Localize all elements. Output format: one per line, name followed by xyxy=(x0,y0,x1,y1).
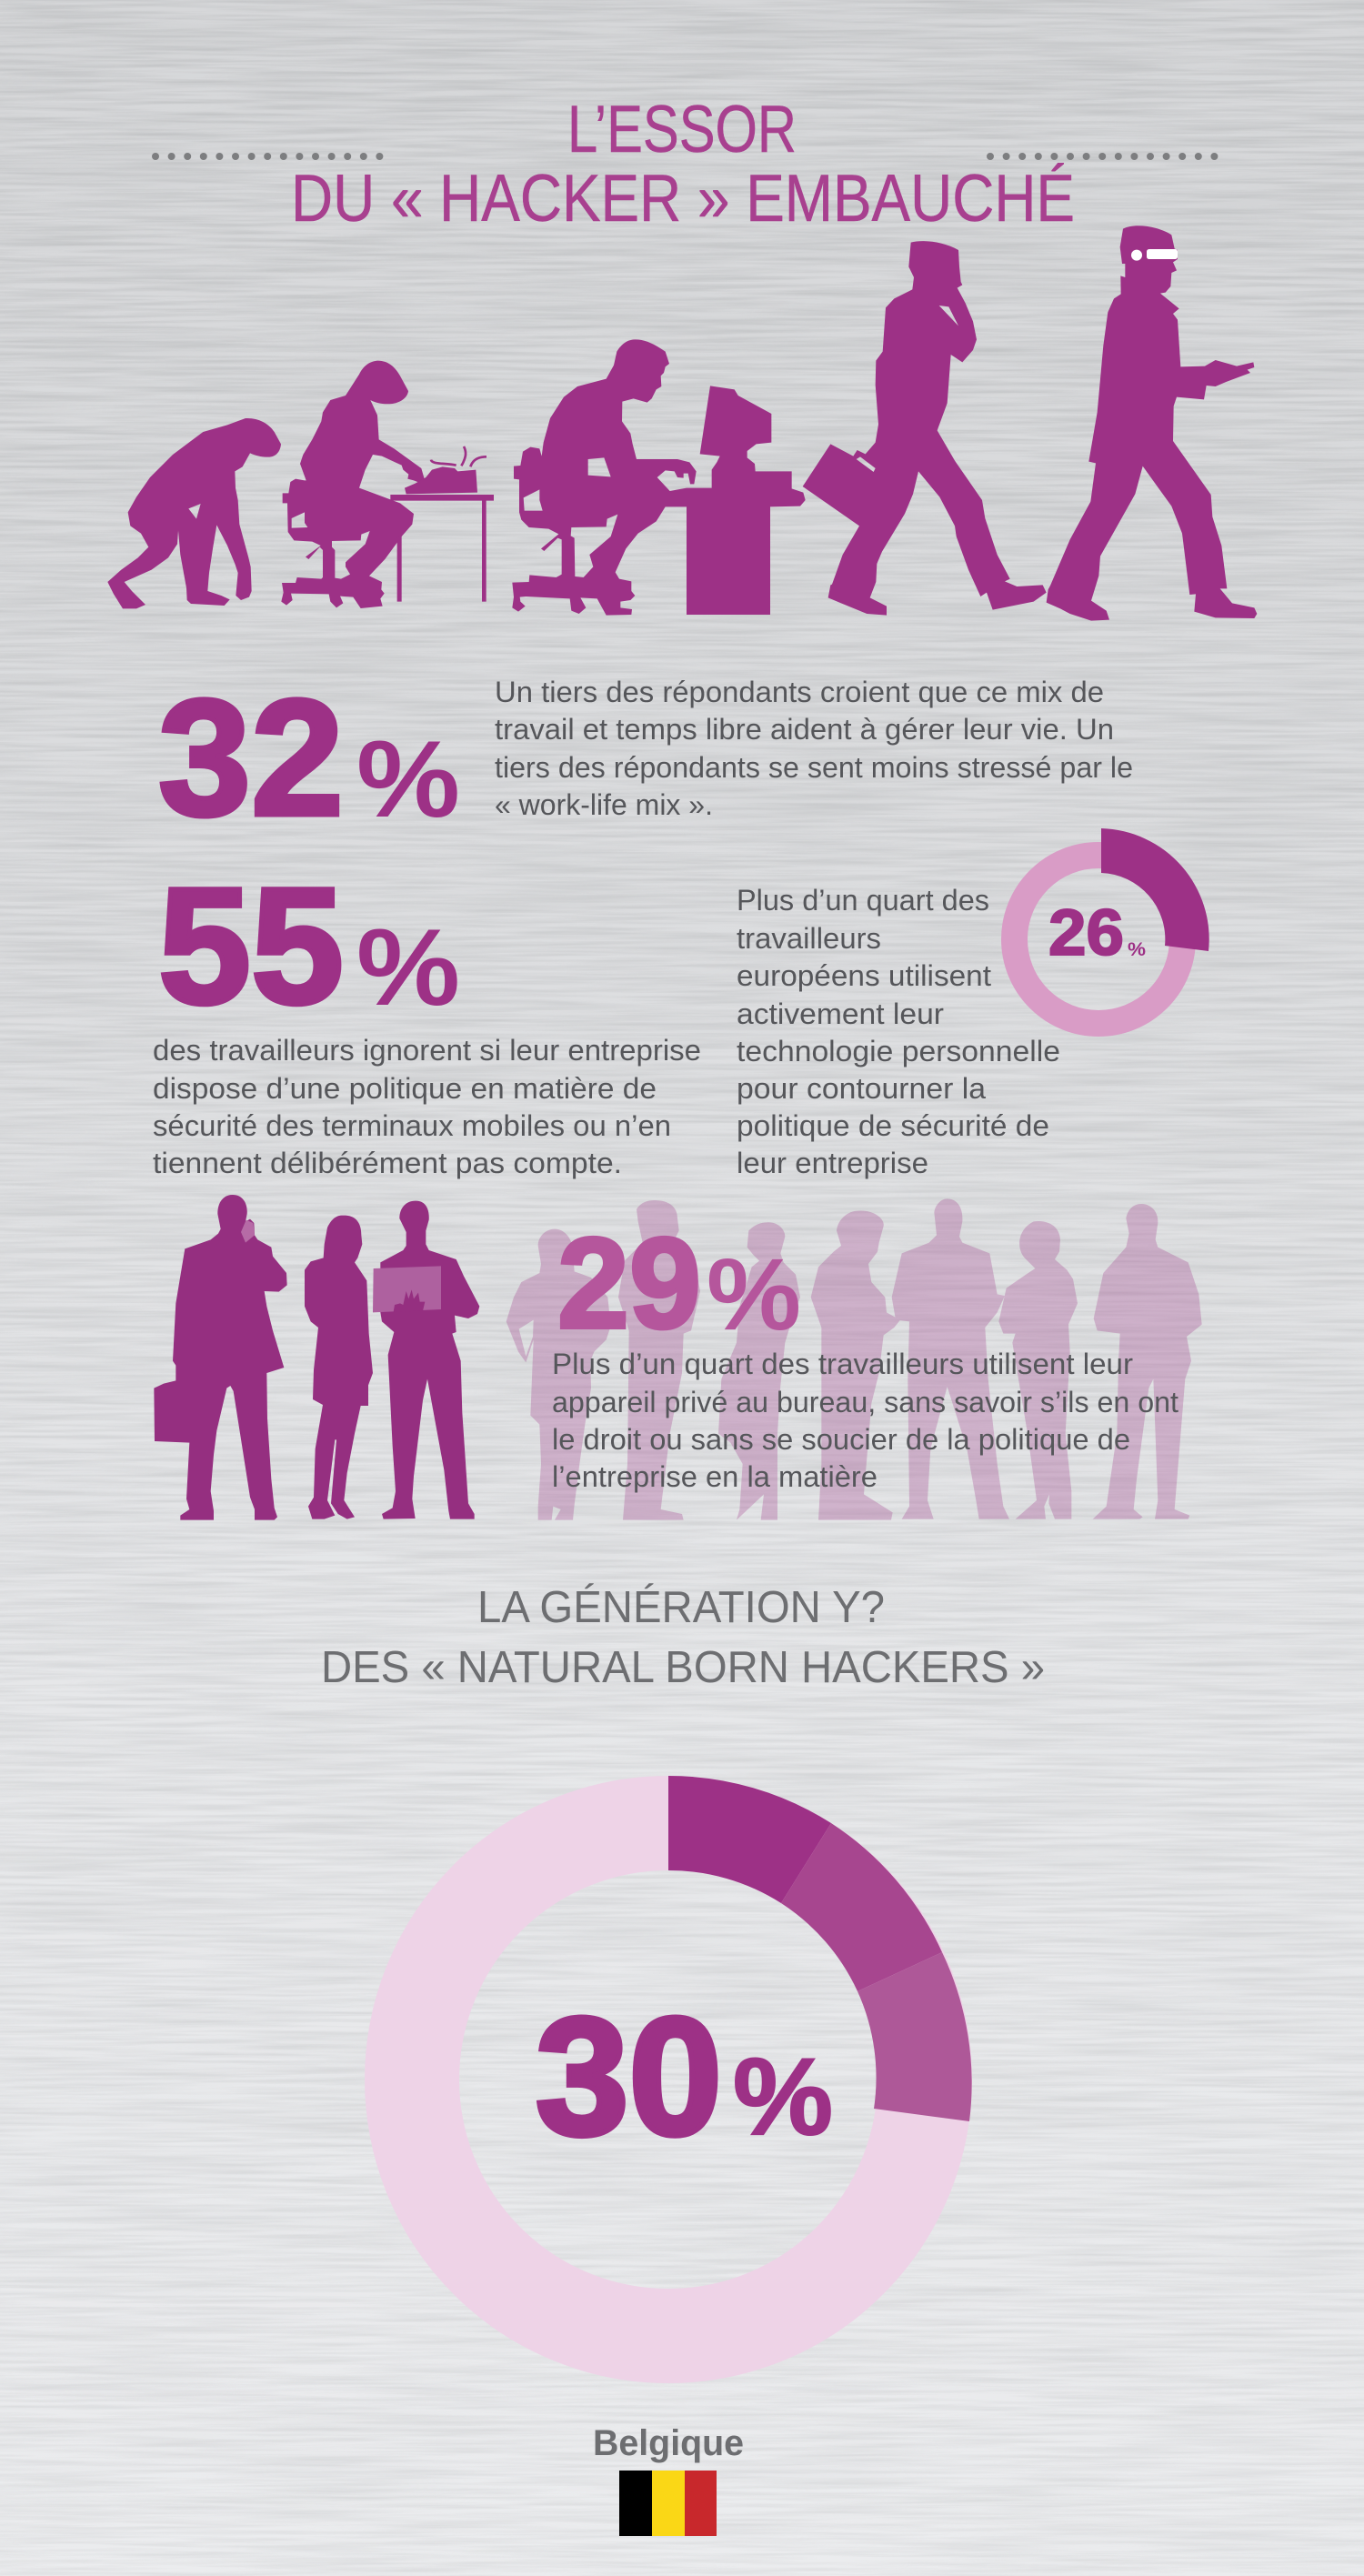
stat: 29%: % xyxy=(707,1238,801,1351)
text: 26% description: activement leur xyxy=(737,997,944,1030)
heading: génération Y: DES « NATURAL BORN HACKERS » xyxy=(321,1642,1045,1692)
text: 55% description: des travailleurs ignorent si leur entreprise xyxy=(153,1034,701,1067)
title dotted rule left xyxy=(155,153,380,160)
text: 29% description: le droit ou sans se soucier de la politique de xyxy=(552,1423,1130,1456)
donut chart: 30%: 30 xyxy=(536,1982,722,2170)
icon: walking man on phone with briefcase xyxy=(803,241,1047,616)
text: 29% description: Plus d’un quart des travailleurs utilisent leur xyxy=(552,1348,1133,1380)
text: 55% description xyxy=(153,1034,701,1179)
evolution silhouettes xyxy=(107,226,1257,621)
title: L’ESSOR xyxy=(567,93,797,166)
icon: man with tablet xyxy=(373,1201,479,1519)
stat: 32%: % xyxy=(356,718,460,840)
stat: 55%: 55 xyxy=(158,853,344,1038)
title: DU « HACKER » EMBAUCHÉ xyxy=(291,162,1075,236)
title dotted rule right xyxy=(990,153,1215,160)
text: 32% description: « work-life mix ». xyxy=(495,788,713,821)
text: 55% description: dispose d’une politique en matière de xyxy=(153,1072,657,1105)
text: 26% description: politique de sécurité de xyxy=(737,1109,1049,1142)
text: 32% description: Un tiers des répondants croient que ce mix de xyxy=(495,676,1104,708)
stat: 55%: % xyxy=(356,907,460,1028)
donut chart: 30%: % xyxy=(733,2036,833,2158)
donut chart: 26%: % xyxy=(1128,939,1146,960)
icon: typist at typewriter xyxy=(281,361,494,608)
text: 32% description: tiers des répondants se sent moins stressé par le xyxy=(495,751,1133,784)
donut chart: 26%: 26 xyxy=(1048,897,1124,969)
donut chart: 30% xyxy=(412,1776,972,2336)
icon: hacker with glasses and phone xyxy=(1047,226,1257,621)
text: 55% description: tiennent délibérément pas compte. xyxy=(153,1147,622,1179)
stat: 29% xyxy=(557,1211,801,1356)
stat: 29%: 29 xyxy=(557,1211,701,1356)
text: 26% description xyxy=(737,884,1060,1179)
text: 29% description: appareil privé au bureau, sans savoir s’ils en ont xyxy=(552,1386,1178,1418)
icon: Belgian flag xyxy=(619,2471,717,2536)
icon: office worker at computer xyxy=(512,339,806,616)
text: 26% description: technologie personnelle xyxy=(737,1035,1060,1067)
icon: man with phone and briefcase xyxy=(154,1195,287,1520)
text: 55% description: sécurité des terminaux mobiles ou n’en xyxy=(153,1109,671,1142)
text: 26% description: travailleurs xyxy=(737,922,881,955)
text: 29% description: l’entreprise en la matière xyxy=(552,1460,878,1493)
icon: ape xyxy=(107,418,281,608)
text: 26% description: pour contourner la xyxy=(737,1072,987,1105)
icon: woman xyxy=(305,1216,373,1519)
stat: 32% xyxy=(158,665,460,850)
text: 26% description: leur entreprise xyxy=(737,1147,928,1179)
pale crowd silhouettes xyxy=(506,1198,1202,1520)
dark trio silhouettes xyxy=(154,1195,479,1520)
stat: 32%: 32 xyxy=(158,665,344,850)
text: 32% description xyxy=(495,676,1133,821)
text: 26% description: Plus d’un quart des xyxy=(737,884,989,917)
stat: 55% xyxy=(158,853,460,1038)
label: Belgique: Belgique xyxy=(593,2423,744,2463)
heading: génération Y xyxy=(321,1582,1045,1692)
text: 26% description: européens utilisent xyxy=(737,959,991,992)
title xyxy=(291,93,1075,236)
donut chart: 26% xyxy=(1015,828,1209,1024)
heading: génération Y: LA GÉNÉRATION Y? xyxy=(477,1582,885,1632)
text: 32% description: travail et temps libre aident à gérer leur vie. Un xyxy=(495,713,1114,746)
text: 29% description xyxy=(552,1348,1178,1493)
